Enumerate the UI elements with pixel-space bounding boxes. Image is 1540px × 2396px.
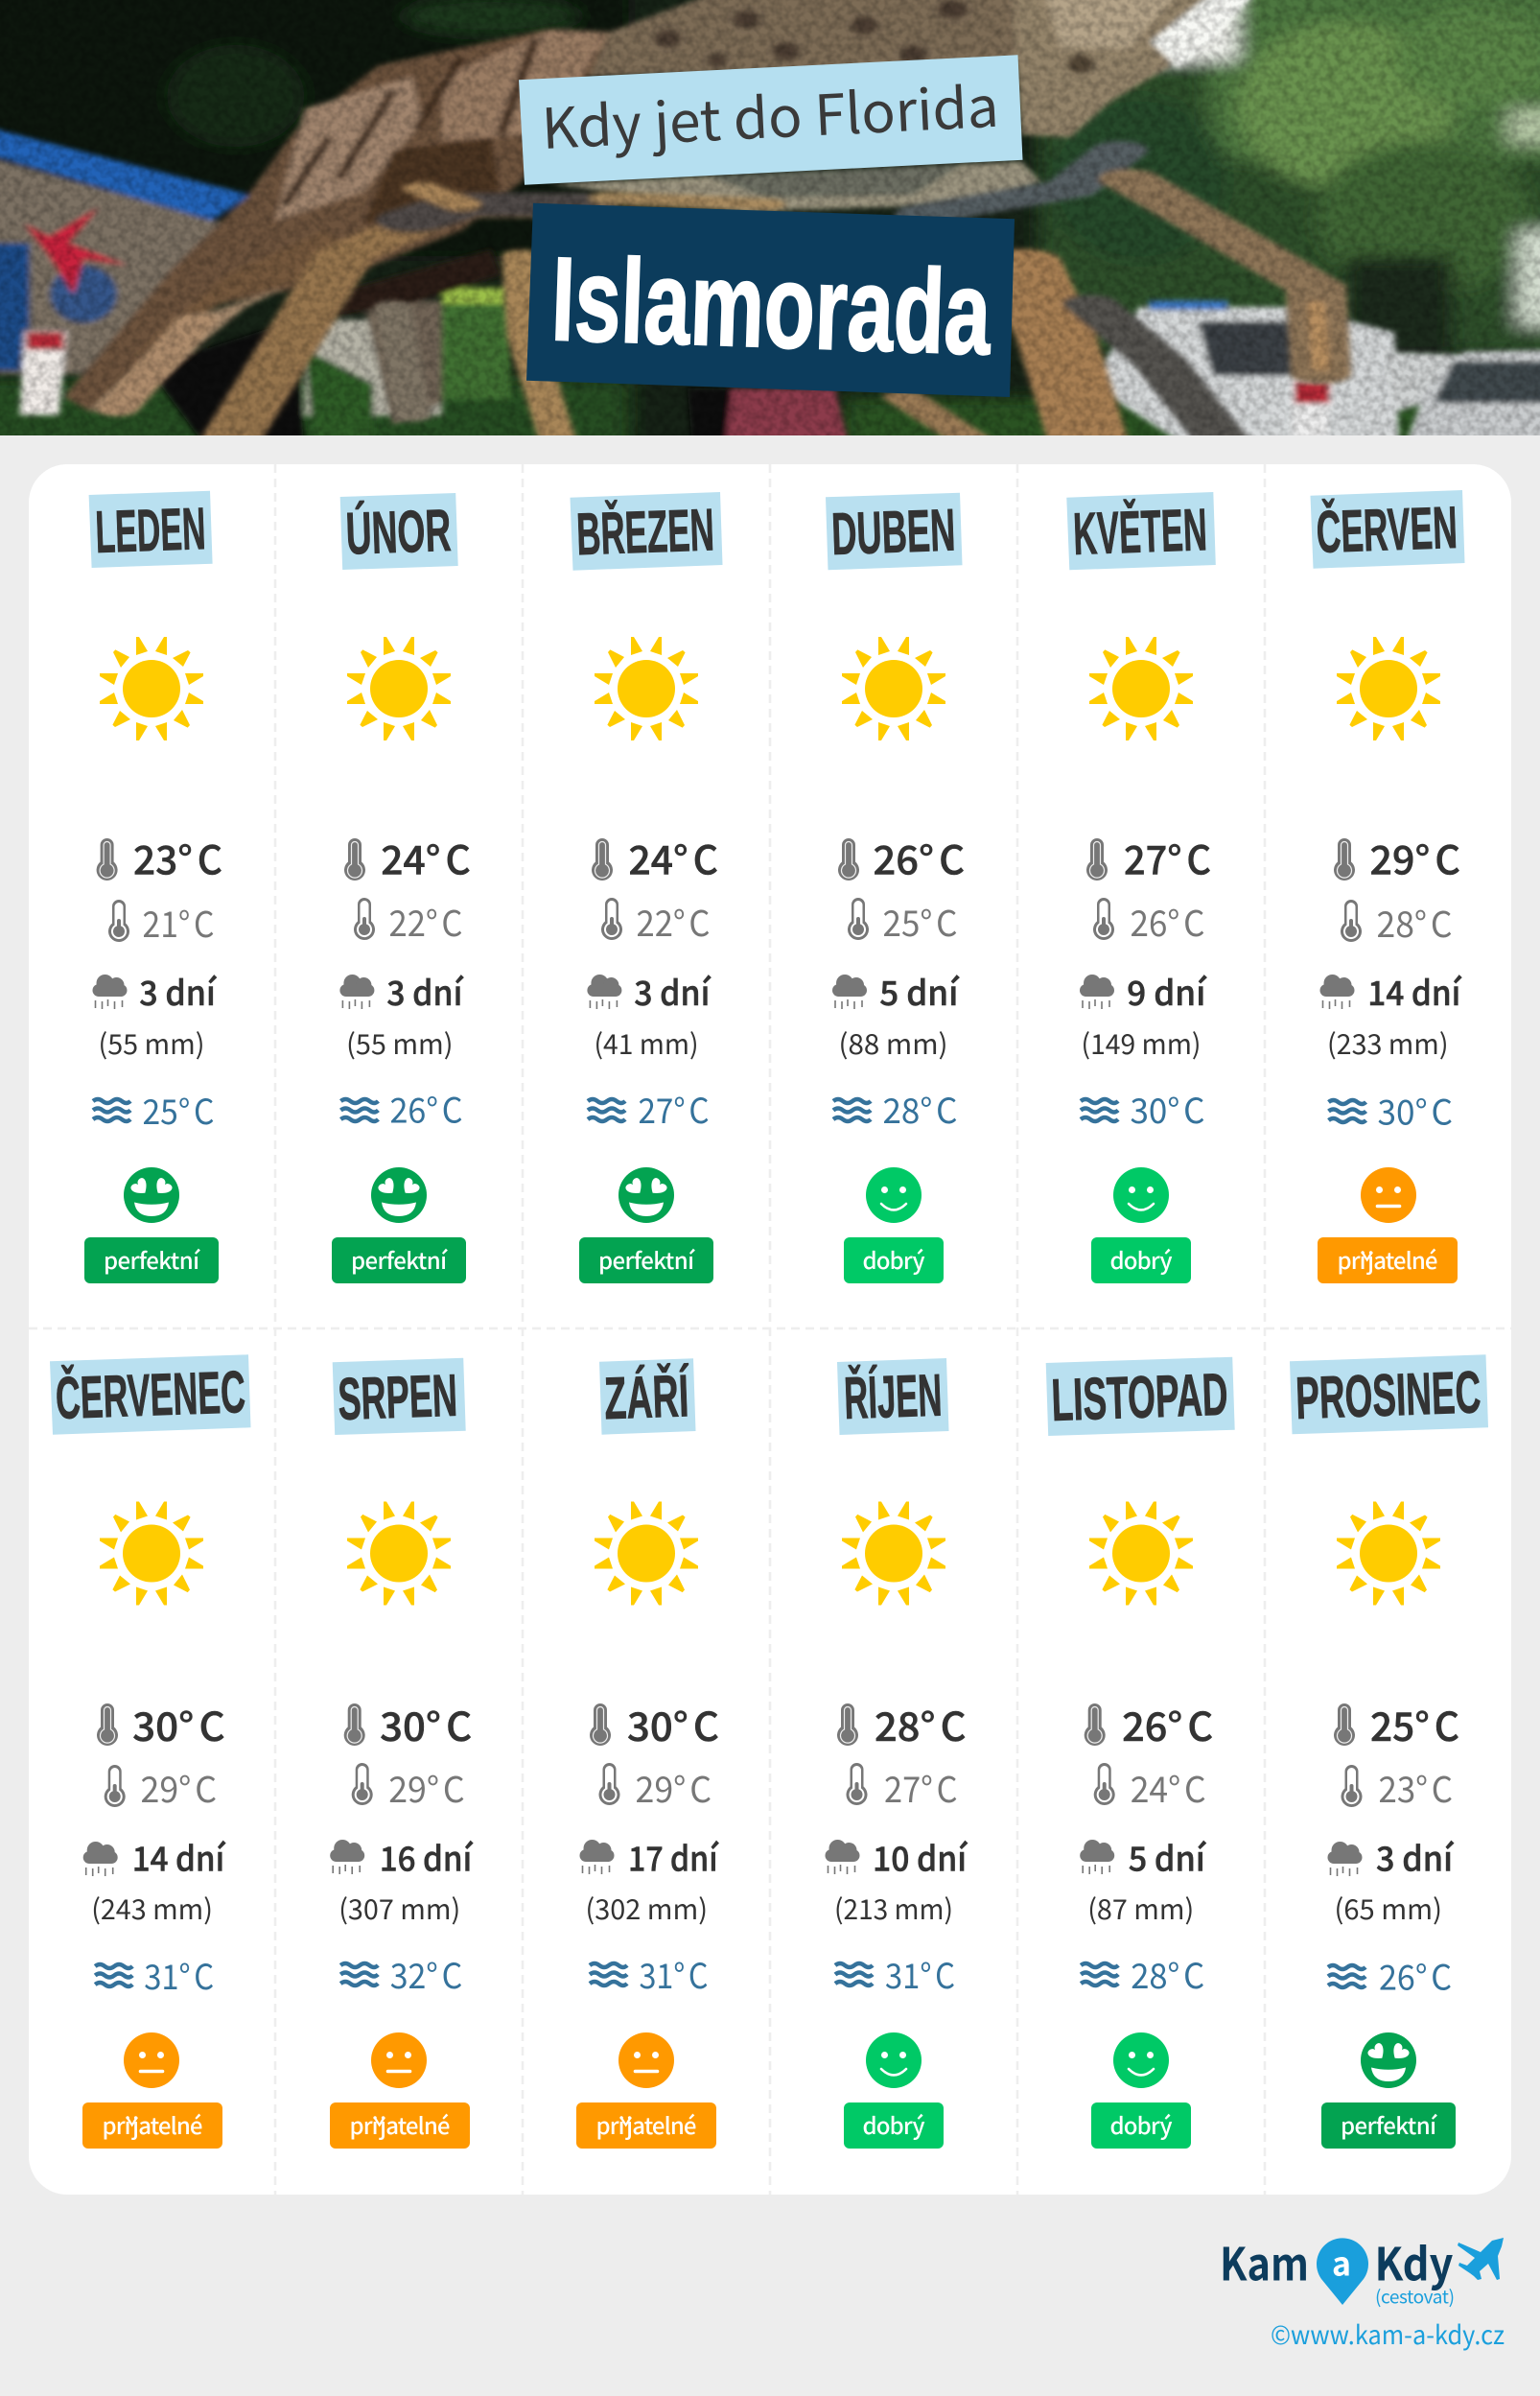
rainy days <box>339 967 464 1016</box>
sea temperature: 27°C <box>639 1084 710 1134</box>
rating smiley <box>371 1167 427 1223</box>
icon: sun <box>100 1502 203 1606</box>
sea temperature: 26°C <box>389 1084 463 1134</box>
rating badge: přijatelné <box>596 2107 696 2141</box>
rating badge <box>579 1237 713 1283</box>
panel: zari <box>576 1358 719 2149</box>
month label: unor: ÚNOR <box>345 498 452 568</box>
low temperature <box>1341 896 1452 948</box>
low temperature: 24°C <box>1131 1761 1206 1813</box>
sea temperature <box>835 1949 955 1999</box>
icon: sun <box>1089 1502 1193 1606</box>
sea temperature: 32°C <box>390 1949 462 1999</box>
month label: listopad: LISTOPAD <box>1050 1362 1229 1434</box>
low temperature <box>354 895 462 947</box>
low temperature <box>601 895 710 947</box>
month label: rijen: ŘÍJEN <box>843 1362 943 1432</box>
rating smiley <box>866 2032 922 2088</box>
rating smiley <box>618 1167 674 1223</box>
rating badge: přijatelné <box>349 2107 451 2141</box>
low temperature: 28°C <box>1377 896 1452 948</box>
sea temperature <box>588 1084 710 1134</box>
rating badge: dobrý <box>1110 1242 1172 1276</box>
panel: brezen <box>570 492 723 1283</box>
rainy days: 14 dní <box>1367 967 1462 1016</box>
rating smiley <box>866 1167 922 1223</box>
low temperature: 29°C <box>388 1761 465 1813</box>
rainy days: 5 dní <box>1129 1832 1207 1882</box>
icon: sun <box>1337 637 1440 740</box>
panel: rijen <box>825 1358 968 2149</box>
low temperature <box>848 895 957 947</box>
precipitation: (243 mm) <box>91 1888 213 1928</box>
panel: unor <box>332 493 471 1283</box>
rainy days: 16 dní <box>380 1832 474 1882</box>
sea temperature: 28°C <box>1131 1949 1204 1999</box>
month label: kveten: KVĚTEN <box>1072 497 1208 568</box>
rainy days <box>1319 967 1462 1016</box>
sea temperature: 31°C <box>885 1949 955 1999</box>
icon: sun <box>595 637 698 740</box>
rating badge <box>844 1237 944 1283</box>
rating badge: dobrý <box>863 1242 924 1276</box>
rating badge: perfektní <box>351 1242 448 1276</box>
precipitation: (55 mm) <box>98 1022 205 1063</box>
low temperature <box>105 1761 217 1813</box>
rainy days: 14 dní <box>132 1832 226 1882</box>
sea temperature: 26°C <box>1379 1951 1452 2001</box>
rating badge <box>1091 1237 1191 1283</box>
main white card <box>29 464 1511 2195</box>
rating badge <box>82 2102 222 2149</box>
precipitation: (41 mm) <box>595 1022 698 1063</box>
icon: sun <box>1089 637 1193 740</box>
low temperature: 26°C <box>1130 895 1204 947</box>
rating badge: dobrý <box>1110 2107 1172 2141</box>
low temperature <box>1094 1761 1206 1813</box>
rating badge: perfektní <box>1341 2107 1437 2141</box>
rating smiley <box>124 1167 179 1223</box>
low temperature: 25°C <box>882 895 957 947</box>
icon: airplane <box>1458 2238 1504 2280</box>
month label: srpen: SRPEN <box>337 1363 458 1433</box>
rainy days: 3 dní <box>1376 1832 1455 1882</box>
rating badge <box>332 1237 466 1283</box>
rating badge: přijatelné <box>102 2107 203 2141</box>
month label: unor <box>340 493 458 570</box>
sea temperature <box>833 1084 957 1134</box>
month label: duben: DUBEN <box>830 498 956 568</box>
month label: zari <box>599 1358 696 1435</box>
sea temperature: 30°C <box>1130 1084 1204 1134</box>
logo: Kam a Kdy: Kdy <box>1375 2228 1454 2294</box>
high temperature: 28°C <box>875 1695 967 1752</box>
high temperature: 24°C <box>629 829 718 886</box>
rating badge <box>1318 1237 1458 1283</box>
low temperature: 29°C <box>140 1761 217 1813</box>
website url: ©www.kam-a-kdy.cz <box>1271 2314 1505 2352</box>
sea temperature <box>1081 1949 1204 1999</box>
low temperature: 29°C <box>635 1761 712 1813</box>
high temperature: 30°C <box>380 1695 472 1752</box>
high temperature <box>1086 829 1211 886</box>
sea temperature <box>93 1085 215 1135</box>
rating smiley <box>371 2032 427 2088</box>
rating smiley <box>1113 1167 1169 1223</box>
low temperature <box>1093 895 1204 947</box>
sea temperature <box>1328 1951 1452 2001</box>
panel: kveten <box>1066 492 1216 1283</box>
rating badge <box>844 2102 944 2149</box>
panel: prosinec <box>1290 1354 1488 2149</box>
sea temperature <box>95 1950 214 2000</box>
high temperature: 29°C <box>1369 829 1460 886</box>
rainy days <box>832 967 960 1016</box>
month label: rijen <box>837 1358 949 1435</box>
title ribbon: Islamorada <box>526 203 1015 397</box>
logo: Kam a Kdy: Kam <box>1220 2228 1309 2294</box>
logo: Kam a Kdy: a <box>1332 2239 1351 2286</box>
month label: cerven <box>1310 490 1465 569</box>
logo: Kam a Kdy <box>1220 2228 1504 2310</box>
precipitation: (55 mm) <box>346 1022 453 1063</box>
rainy days: 5 dní <box>879 967 960 1016</box>
icon: sun <box>842 1502 945 1606</box>
rating badge: perfektní <box>104 1242 200 1276</box>
icon: sun <box>347 637 451 740</box>
rainy days <box>330 1832 474 1882</box>
sea temperature: 31°C <box>639 1949 708 1999</box>
sea temperature: 31°C <box>144 1950 214 2000</box>
rainy days: 3 dní <box>386 967 464 1016</box>
rainy days <box>1327 1832 1455 1882</box>
sea temperature <box>1081 1084 1204 1134</box>
precipitation: (307 mm) <box>338 1888 460 1928</box>
high temperature: 26°C <box>873 829 965 886</box>
rainy days: 3 dní <box>139 967 218 1016</box>
month label: brezen <box>570 492 723 571</box>
low temperature <box>352 1761 465 1813</box>
high temperature: 27°C <box>1124 829 1211 886</box>
icon: sun <box>347 1502 451 1606</box>
sea temperature: 28°C <box>882 1084 957 1134</box>
month label: cervenec: ČERVENEC <box>55 1359 246 1432</box>
low temperature: 22°C <box>389 895 462 947</box>
rainy days: 3 dní <box>634 967 712 1016</box>
month label: kveten <box>1066 492 1216 570</box>
icon: sun <box>100 637 203 740</box>
rating badge <box>330 2102 470 2149</box>
high temperature: 25°C <box>1370 1695 1459 1752</box>
high temperature: 30°C <box>627 1695 719 1752</box>
rating badge: dobrý <box>863 2107 924 2141</box>
sea temperature <box>340 1949 462 1999</box>
rainy days <box>1080 967 1207 1016</box>
sea temperature <box>590 1949 708 1999</box>
low temperature: 21°C <box>142 896 215 948</box>
high temperature: 24°C <box>381 829 471 886</box>
panel: srpen <box>330 1358 474 2149</box>
title ribbon: Islamorada: Islamorada <box>549 233 993 380</box>
panel: cervenec <box>50 1354 251 2149</box>
icon: sun <box>595 1502 698 1606</box>
rating badge <box>576 2102 716 2149</box>
rating badge: perfektní <box>598 1242 695 1276</box>
precipitation: (65 mm) <box>1335 1888 1442 1928</box>
rating badge <box>84 1237 219 1283</box>
rainy days <box>579 1832 719 1882</box>
panel: duben <box>826 493 965 1283</box>
high temperature: 30°C <box>132 1695 225 1752</box>
rating badge <box>1091 2102 1191 2149</box>
month label: leden: LEDEN <box>94 496 207 566</box>
logo: Kam a Kdy: (cestovat) <box>1375 2284 1455 2310</box>
panel: listopad <box>1046 1357 1235 2149</box>
low temperature <box>598 1761 712 1813</box>
sea temperature: 30°C <box>1377 1086 1453 1136</box>
hero photo: giant lobster statue <box>0 0 1540 480</box>
rating smiley <box>1113 2032 1169 2088</box>
rainy days <box>587 967 712 1016</box>
rainy days <box>92 967 218 1016</box>
rainy days: 9 dní <box>1127 967 1207 1016</box>
low temperature: 27°C <box>884 1761 957 1813</box>
precipitation: (233 mm) <box>1327 1022 1448 1063</box>
rating smiley <box>1361 2032 1416 2088</box>
rainy days <box>1080 1832 1207 1882</box>
sea temperature <box>1329 1086 1453 1136</box>
month label: duben <box>826 493 963 570</box>
sea temperature: 25°C <box>142 1085 215 1135</box>
low temperature: 23°C <box>1379 1761 1453 1813</box>
icon: sun <box>842 637 945 740</box>
precipitation: (213 mm) <box>834 1888 953 1928</box>
rating smiley <box>1361 1167 1416 1223</box>
month label: zari: ZÁŘÍ <box>603 1363 691 1432</box>
month label: srpen <box>333 1358 466 1435</box>
title ribbon: Kdy jet do Florida: Kdy jet do Florida <box>540 62 1000 165</box>
month label: brezen: BŘEZEN <box>575 497 715 568</box>
low temperature <box>108 896 215 948</box>
icon: sun <box>1337 1502 1440 1606</box>
low temperature: 22°C <box>637 895 710 947</box>
rating badge <box>1321 2102 1456 2149</box>
rainy days: 17 dní <box>628 1832 719 1882</box>
panel: cerven <box>1310 490 1465 1283</box>
rainy days: 10 dní <box>873 1832 968 1882</box>
month label: cervenec <box>50 1354 251 1435</box>
month label: listopad <box>1046 1357 1235 1436</box>
sea temperature <box>340 1084 463 1134</box>
low temperature <box>1341 1761 1453 1813</box>
icon: map pin <box>1317 2238 1368 2305</box>
month label: leden <box>89 491 213 568</box>
precipitation: (88 mm) <box>838 1022 947 1063</box>
rainy days <box>825 1832 968 1882</box>
panel: leden <box>84 491 222 1283</box>
precipitation: (149 mm) <box>1082 1022 1201 1063</box>
rainy days <box>83 1832 226 1882</box>
rating smiley <box>124 2032 179 2088</box>
rating badge: přijatelné <box>1337 1242 1438 1276</box>
rating smiley <box>618 2032 674 2088</box>
high temperature: 23°C <box>133 829 222 886</box>
precipitation: (302 mm) <box>585 1888 708 1928</box>
precipitation: (87 mm) <box>1087 1888 1194 1928</box>
high temperature: 26°C <box>1122 1695 1213 1752</box>
low temperature <box>846 1761 957 1813</box>
